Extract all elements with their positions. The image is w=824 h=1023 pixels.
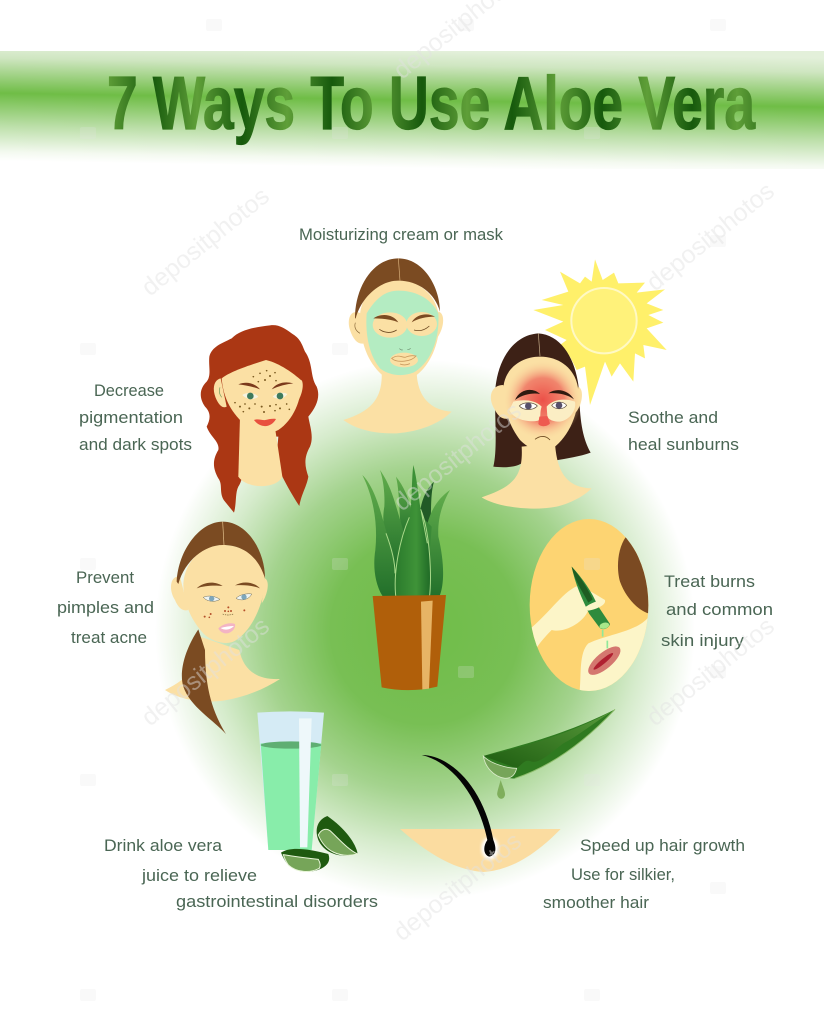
- watermark: depositphotos: [388, 827, 527, 947]
- label: acne: pimples and: [57, 599, 154, 617]
- label: acne: Prevent: [76, 569, 134, 587]
- label: juice: [104, 837, 378, 911]
- label: juice: gastrointestinal disorders: [176, 893, 378, 911]
- woman with face mask: [343, 258, 452, 433]
- flower pot: [373, 595, 446, 690]
- hair follicle on skin: [400, 755, 561, 872]
- watermark: depositphotos: [641, 612, 780, 732]
- woman with acne: [165, 522, 280, 734]
- label: hair: Speed up hair growth: [580, 837, 745, 855]
- label: juice: juice to relieve: [141, 867, 257, 885]
- label: acne: [57, 569, 154, 647]
- cut aloe pieces: [281, 816, 358, 872]
- label: pigmentation: pigmentation: [79, 409, 183, 427]
- woman with red hair and freckles: [201, 325, 318, 513]
- label: mask: Moisturizing cream or mask: [299, 226, 504, 244]
- watermark: depositphotos: [136, 182, 275, 302]
- watermark: depositphotos: [388, 397, 527, 517]
- watermark: depositphotos: [641, 177, 780, 297]
- watermark: depositphotos: [136, 612, 275, 732]
- burn treatment oval: [527, 519, 653, 693]
- label: sunburns: heal sunburns: [628, 436, 739, 454]
- label: hair: Use for silkier,: [571, 866, 675, 884]
- label: juice: Drink aloe vera: [104, 837, 223, 855]
- label: pigmentation: and dark spots: [79, 436, 192, 454]
- label: pigmentation: Decrease: [94, 382, 164, 400]
- aloe leaves: [362, 465, 450, 598]
- glass of aloe juice: [257, 711, 358, 872]
- label: sunburns: Soothe and: [628, 409, 718, 427]
- potted aloe plant: [362, 465, 450, 690]
- label: burns: [661, 573, 773, 650]
- sun: [533, 259, 667, 405]
- title band: [0, 51, 824, 169]
- aloe leaf with drop: [483, 709, 615, 799]
- label: pigmentation: [79, 382, 192, 454]
- label: burns: skin injury: [661, 632, 745, 650]
- label: burns: and common: [666, 601, 773, 619]
- label: burns: Treat burns: [664, 573, 755, 591]
- woman with sunburn: [482, 333, 592, 509]
- label: hair: [543, 837, 745, 912]
- green radial glow: [155, 360, 695, 900]
- label: acne: treat acne: [71, 629, 147, 647]
- label: hair: smoother hair: [543, 894, 650, 912]
- label: sunburns: [628, 409, 739, 454]
